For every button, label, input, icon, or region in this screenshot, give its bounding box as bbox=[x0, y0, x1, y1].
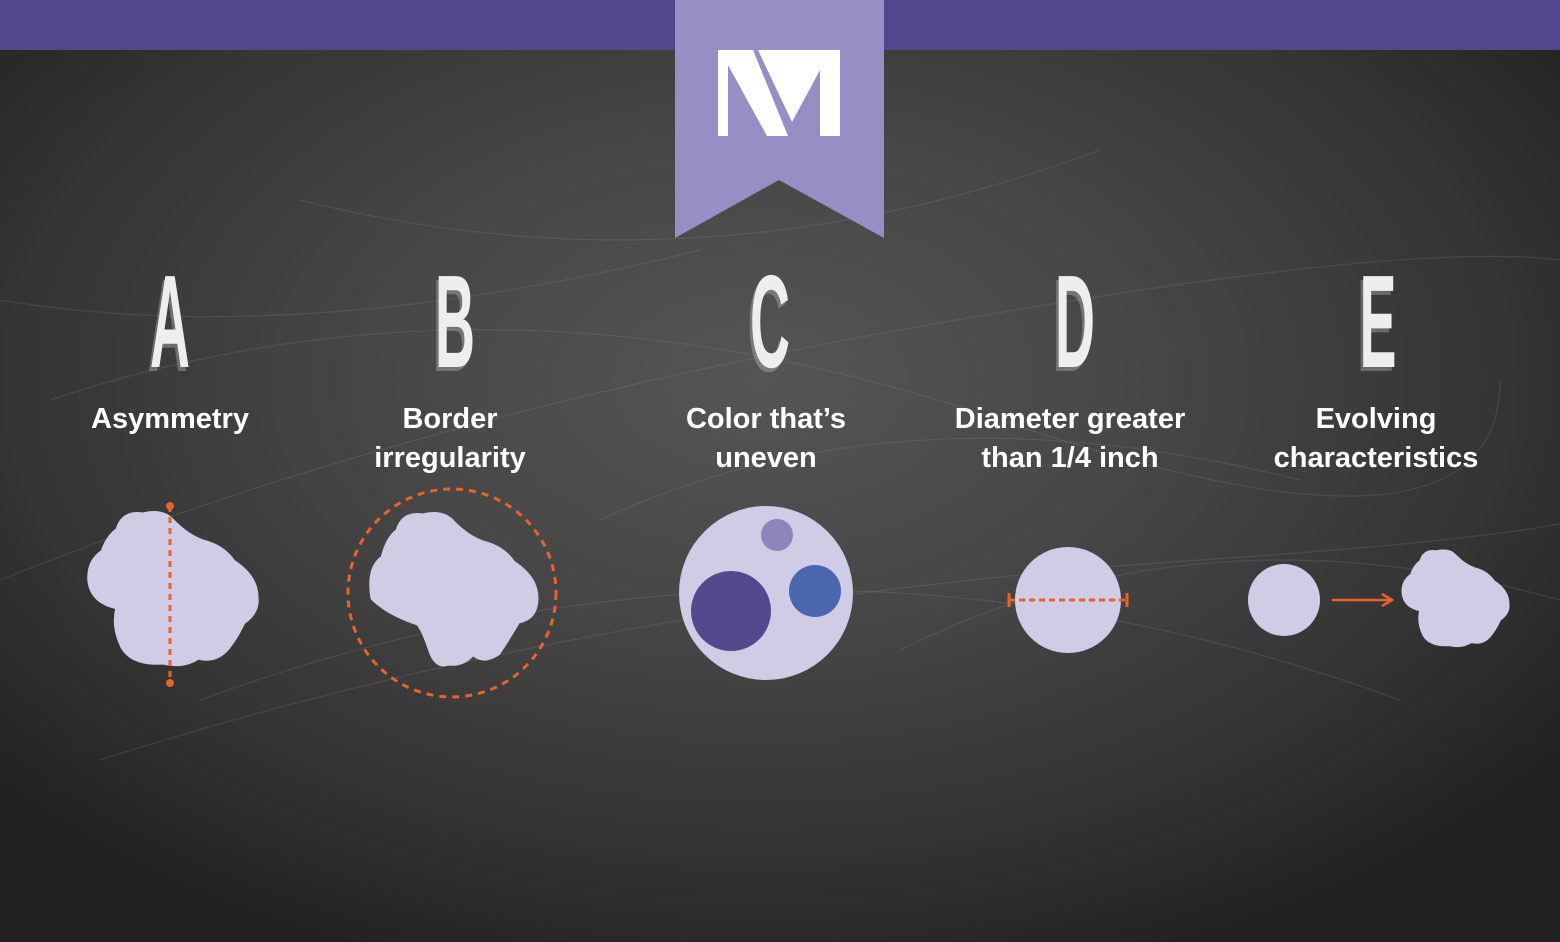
label D: than 1/4 inch bbox=[981, 442, 1159, 474]
banner logo bbox=[675, 0, 884, 238]
letter B: B bbox=[435, 248, 475, 395]
icon: border bbox=[348, 489, 556, 697]
label E: characteristics bbox=[1274, 442, 1478, 474]
label B bbox=[374, 403, 526, 474]
label D: Diameter greater bbox=[955, 403, 1185, 435]
icon: diameter bbox=[1009, 547, 1127, 653]
label E: Evolving bbox=[1316, 403, 1436, 435]
top bar bbox=[0, 0, 1560, 50]
label D bbox=[955, 403, 1185, 474]
label B: irregularity bbox=[374, 442, 526, 474]
icon: asymmetry bbox=[90, 502, 256, 687]
label A: Asymmetry bbox=[91, 403, 249, 435]
label C: uneven bbox=[715, 442, 817, 474]
letter E: E bbox=[1360, 248, 1396, 395]
icon: evolving bbox=[1248, 551, 1508, 646]
label C: Color that’s bbox=[686, 403, 846, 435]
icon: color bbox=[679, 506, 853, 680]
letter A: A bbox=[150, 248, 190, 395]
letter C: C bbox=[750, 248, 790, 395]
label B: Border bbox=[402, 403, 498, 435]
label E bbox=[1274, 403, 1478, 474]
letter D: D bbox=[1055, 248, 1095, 395]
label C bbox=[686, 403, 846, 474]
